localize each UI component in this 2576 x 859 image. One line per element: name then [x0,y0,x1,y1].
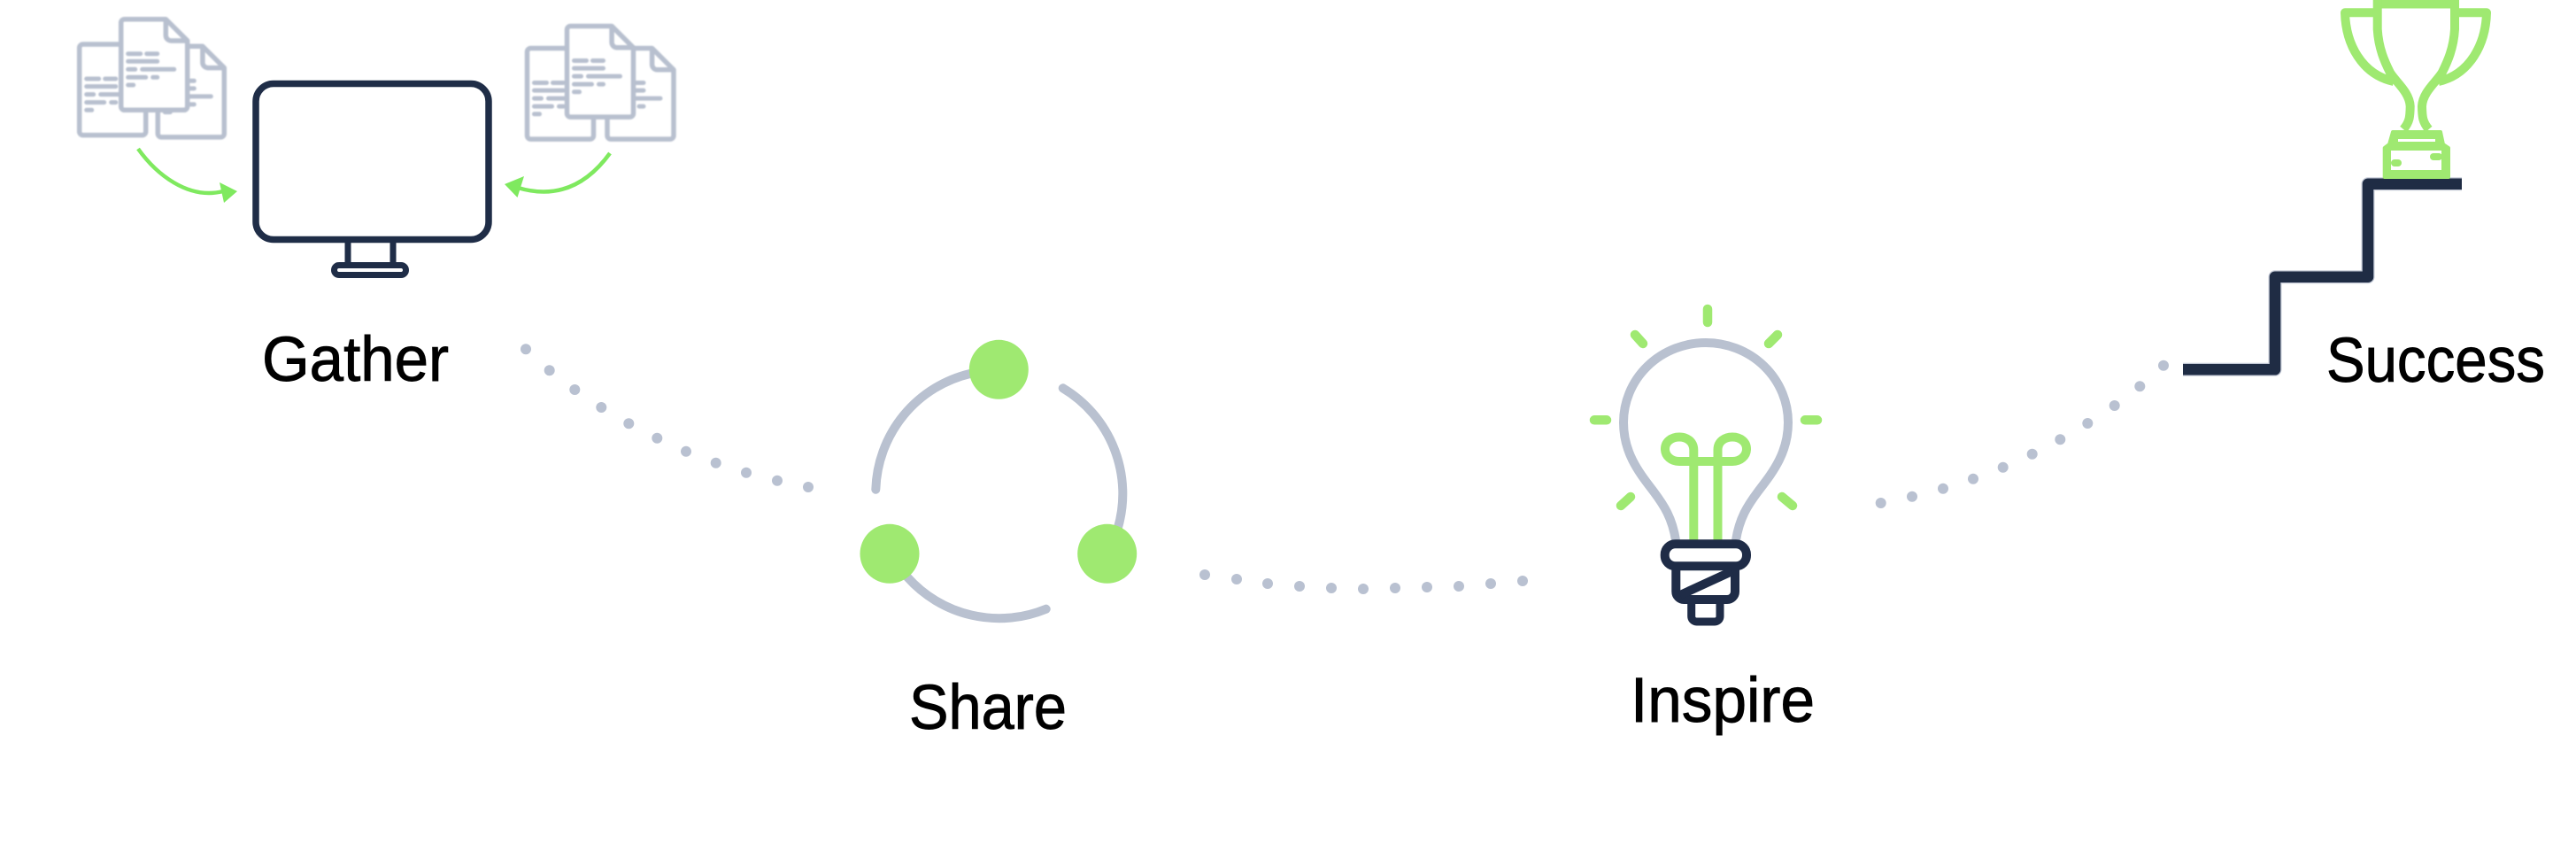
dotted connector: gather to share [521,344,814,492]
share nodes [860,340,1137,584]
dotted connector: inspire to success [1876,360,2169,508]
dotted connector: share to inspire [1199,569,1528,594]
icon: gather [80,19,674,275]
icon: documents left [80,19,224,137]
trophy cup and handles [2345,0,2487,129]
bulb filament [1665,437,1747,540]
bulb glass [1623,343,1788,540]
share ring arcs [875,374,1122,618]
icon: trophy [2345,0,2487,177]
icon: light bulb [1594,309,1817,622]
trophy base [2385,132,2449,177]
label: Success: Success [2326,326,2545,396]
icon: share [860,340,1137,618]
icon: documents right [528,27,674,139]
label: Share: Share [909,673,1067,743]
icon: stairs [2183,184,2462,369]
icon: monitor [256,83,489,275]
bulb base [1665,544,1747,622]
arrow: right documents to monitor [505,153,610,197]
label: Gather: Gather [262,325,449,395]
arrow: left documents to monitor [138,149,237,203]
bulb rays [1594,309,1817,506]
label: Inspire: Inspire [1631,666,1815,736]
